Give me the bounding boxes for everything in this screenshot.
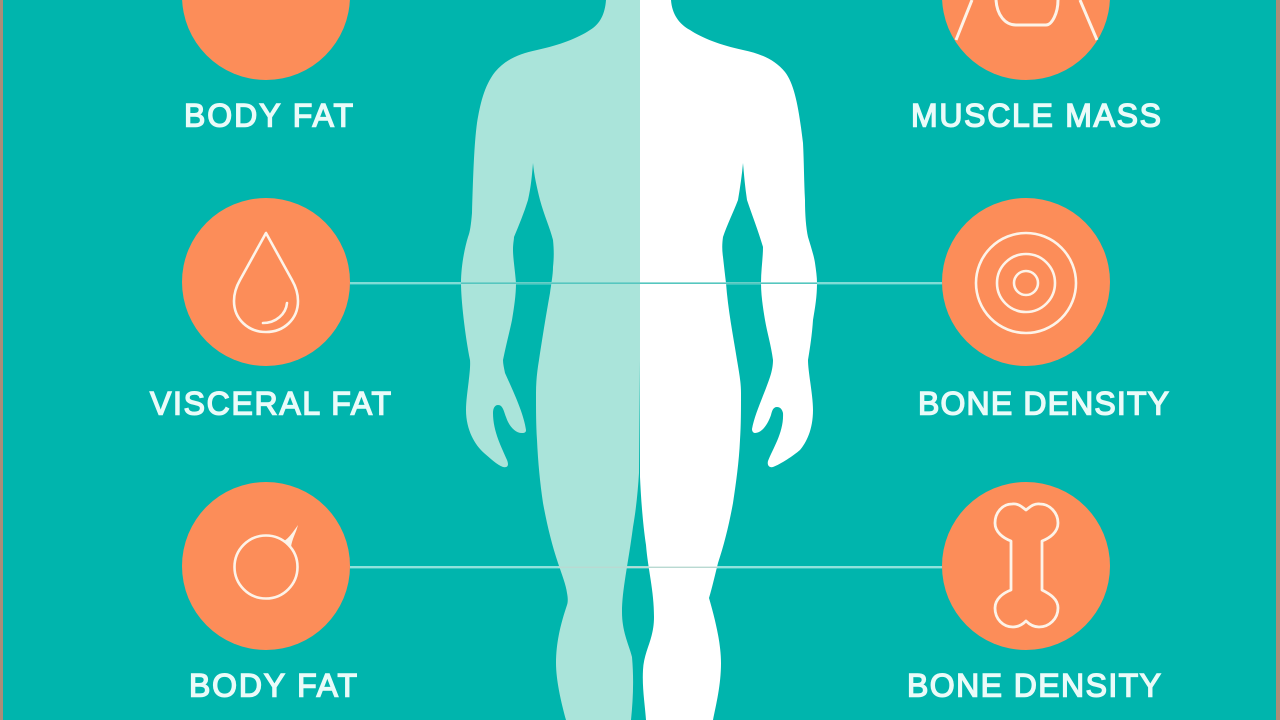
icon: concentric rings [942, 198, 1110, 366]
right half of body [640, 0, 817, 720]
panel: body fat (bottom left) [182, 482, 357, 704]
label: bone density: BONE DENSITY [918, 386, 1169, 422]
connector lines [350, 282, 942, 568]
icon: round fat cell [182, 482, 350, 650]
panel: body fat (top left) [182, 0, 353, 134]
panel: bone density (target) [918, 198, 1169, 422]
label: body fat: BODY FAT [184, 98, 353, 134]
panel: muscle mass [911, 0, 1161, 134]
label: muscle mass: MUSCLE MASS [911, 98, 1161, 134]
label: visceral fat: VISCERAL FAT [150, 386, 391, 422]
panel: bone density (bone) [907, 482, 1161, 704]
icon: bone [942, 482, 1110, 650]
body silhouette [461, 0, 817, 720]
waist and knee marker lines over body [461, 282, 817, 284]
panel: visceral fat [150, 198, 391, 422]
left half of body [461, 0, 640, 720]
label: body fat: BODY FAT [189, 668, 357, 704]
label: bone density: BONE DENSITY [907, 668, 1161, 704]
icon: body fat circle [182, 0, 350, 80]
icon: water drop [182, 198, 350, 366]
icon: muscle [942, 0, 1110, 80]
